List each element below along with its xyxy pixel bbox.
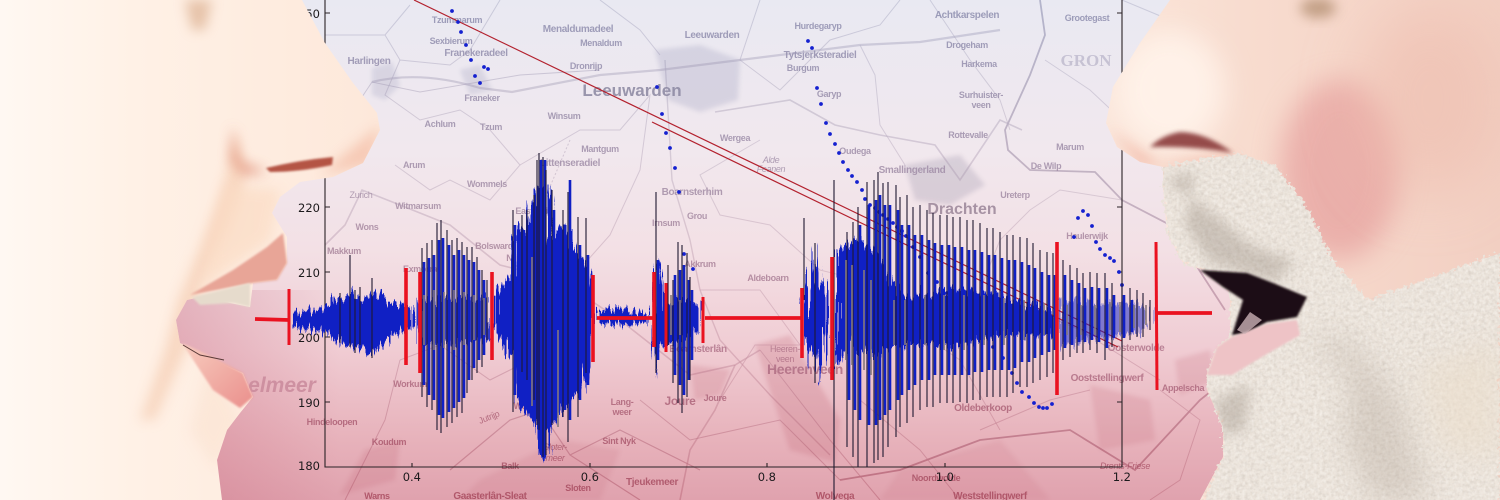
man: open mouth bbox=[1200, 270, 1307, 335]
waveform: dark spikes bbox=[340, 153, 1150, 500]
red phone boundary markers bbox=[255, 242, 1212, 395]
axis tick labels bbox=[298, 7, 1131, 484]
axis tick labels: 0.8 bbox=[758, 470, 776, 484]
woman: nostril bbox=[266, 157, 333, 172]
map: place names: Harlingen bbox=[348, 56, 391, 67]
map: place names: Hindeloopen bbox=[307, 417, 357, 427]
map: place names: Drachten bbox=[927, 201, 997, 218]
map: place names: Idzega bbox=[522, 357, 549, 367]
map: place names: Irnsum bbox=[652, 218, 680, 228]
woman: lower lip bbox=[182, 343, 253, 408]
map: place names: elmeer bbox=[248, 374, 318, 397]
map: place names: Ureterp bbox=[1000, 190, 1031, 200]
map: place names: Sloter- bbox=[543, 442, 567, 452]
map: place names: Harkema bbox=[961, 59, 998, 69]
waveform: blue envelopes bbox=[292, 187, 1150, 457]
map: place names: veen bbox=[776, 354, 794, 364]
map: place names: Joure bbox=[665, 394, 696, 408]
map: built-up town areas bbox=[340, 45, 1215, 500]
map: place names: Lang- bbox=[611, 397, 634, 407]
map: place names: Sexbierum bbox=[430, 36, 473, 46]
map: place names: Franeker bbox=[464, 93, 500, 103]
map: place names: weer bbox=[611, 407, 632, 417]
regression lines bbox=[414, 0, 1122, 347]
map: place names: Menaldumadeel bbox=[543, 24, 614, 35]
man's face in profile bbox=[1106, 0, 1500, 500]
axis tick labels: 50 bbox=[305, 7, 320, 21]
waveform: grey centre strokes bbox=[424, 257, 1146, 427]
map: place names: Feanen bbox=[757, 164, 786, 174]
map: place names: Oosterwolde bbox=[1108, 343, 1165, 354]
map: place names: veen bbox=[971, 100, 991, 110]
map: place names: Balk bbox=[501, 461, 520, 471]
map: place names: Drogeham bbox=[946, 40, 988, 50]
woman: mouth line bbox=[183, 345, 224, 360]
map: place names: Menaldum bbox=[580, 38, 622, 48]
man: inner mouth highlight bbox=[1237, 312, 1262, 334]
map: place names: Surhuister- bbox=[959, 90, 1003, 100]
axis tick labels: 1.0 bbox=[936, 470, 954, 484]
map: place names: Heerenveen bbox=[767, 361, 843, 377]
chart axes bbox=[325, 0, 1122, 467]
map: place names: Oldeberkoop bbox=[954, 403, 1012, 414]
map: place names: Leeuwarden bbox=[685, 30, 740, 41]
map: place names: Workum bbox=[393, 379, 427, 389]
map: place names: Smallingerland bbox=[879, 165, 946, 176]
map: place names: Franekeradeel bbox=[444, 48, 508, 59]
axis tick labels: 220 bbox=[298, 201, 320, 215]
sound waveform bbox=[292, 153, 1150, 500]
axis tick labels: 1.2 bbox=[1113, 470, 1131, 484]
waveform: blue pitch-period strokes bbox=[424, 160, 1132, 455]
man: beard texture bbox=[1150, 150, 1500, 500]
map: place names: Nijland bbox=[506, 253, 534, 263]
map: place names: GRON bbox=[1060, 51, 1112, 70]
map: place names: Alde bbox=[762, 155, 780, 165]
pitch dots bbox=[450, 9, 1124, 410]
map: place names: Wommels bbox=[467, 179, 507, 189]
map: place names: Tytsjerksteradiel bbox=[784, 50, 857, 61]
map: place names: Boarnsterhim bbox=[662, 187, 723, 198]
map: place names: Sint Nyk bbox=[602, 436, 637, 446]
map: place names: Noordwolde bbox=[912, 473, 961, 483]
map: place names: Achlum bbox=[425, 119, 456, 129]
map: place names: Mantgum bbox=[581, 144, 619, 154]
map: place names: Wons bbox=[356, 222, 379, 232]
axis tick labels: 210 bbox=[298, 266, 320, 280]
map: place names: Boarnsterlân bbox=[669, 344, 727, 355]
map: place names: Makkum bbox=[327, 246, 361, 256]
map: place names: Burgum bbox=[787, 63, 820, 73]
map: place names: Rottevalle bbox=[948, 130, 988, 140]
map: place names: Bolsward bbox=[475, 241, 513, 251]
man: skin bbox=[1106, 0, 1500, 500]
map: place names: Wergea bbox=[720, 133, 751, 143]
map: place names: Tzum bbox=[480, 122, 502, 132]
man: beard bbox=[1163, 153, 1500, 500]
woman: skin bbox=[0, 0, 380, 500]
map: place names: Woudsend bbox=[513, 401, 557, 411]
map: place names: Witmarsum bbox=[395, 201, 441, 211]
woman: teeth bbox=[192, 283, 250, 307]
map: place names: Oudega bbox=[839, 146, 872, 156]
map: place names: Arum bbox=[403, 160, 425, 170]
map: roads and borders bbox=[325, 0, 1225, 500]
map: place names: Easterein bbox=[515, 206, 553, 216]
map: place names: Koudum bbox=[372, 437, 407, 447]
map: place names: Akkrum bbox=[684, 259, 716, 269]
axis tick labels: 180 bbox=[298, 459, 320, 473]
map: place names: De Wilp bbox=[1031, 161, 1062, 171]
map: place names: IJlst bbox=[520, 305, 536, 315]
map: place names: Achtkarspelen bbox=[935, 10, 999, 21]
axis tick labels: 200 bbox=[298, 331, 320, 345]
map: place names: Ooststellingwerf bbox=[1071, 373, 1144, 384]
map: place names: Drents-Friese bbox=[1100, 461, 1150, 471]
map: place names: Tzummarum bbox=[432, 15, 483, 25]
axis tick labels: 0.6 bbox=[581, 470, 599, 484]
map: place names: Aldeboarn bbox=[747, 273, 789, 283]
man: skin shading bbox=[1110, 0, 1500, 260]
map: place names: Heeren- bbox=[770, 344, 800, 354]
map: place names: Joure bbox=[704, 393, 727, 403]
map: place names: Tjeukemeer bbox=[626, 477, 678, 488]
man: lower lip bbox=[1207, 320, 1300, 375]
map: place names: Garyp bbox=[817, 89, 842, 99]
map: place names: Exmorra bbox=[403, 264, 438, 274]
woman's face in profile bbox=[0, 0, 380, 500]
map: place names: Dronrijp bbox=[570, 61, 603, 71]
map: place names: meer bbox=[545, 453, 566, 463]
map: place names: Winsum bbox=[548, 111, 581, 121]
axis tick labels: 0.4 bbox=[403, 470, 421, 484]
map: place names: Marum bbox=[1056, 142, 1084, 152]
axis tick labels: 190 bbox=[298, 396, 320, 410]
woman: facial shading bbox=[140, 0, 380, 470]
map: place names: Hurdegaryp bbox=[794, 21, 842, 31]
map: place names: Grootegast bbox=[1065, 13, 1110, 23]
map: place names: Appelscha bbox=[1162, 383, 1206, 393]
map: place names: Zurich bbox=[350, 190, 373, 200]
map: place names: Haulerwijk bbox=[1066, 231, 1109, 241]
woman: upper lip bbox=[190, 233, 287, 295]
map: place names: Grou bbox=[687, 211, 707, 221]
map: place names: Sloten bbox=[565, 483, 591, 493]
map: place names: Jutrijp bbox=[477, 408, 501, 426]
map: place names bbox=[248, 10, 1206, 500]
map: place names: Leeuwarden bbox=[582, 81, 682, 100]
map: place names: Littenseradiel bbox=[540, 158, 601, 169]
map: place names: Sneek bbox=[531, 260, 576, 277]
man: nostril bbox=[1150, 132, 1233, 153]
